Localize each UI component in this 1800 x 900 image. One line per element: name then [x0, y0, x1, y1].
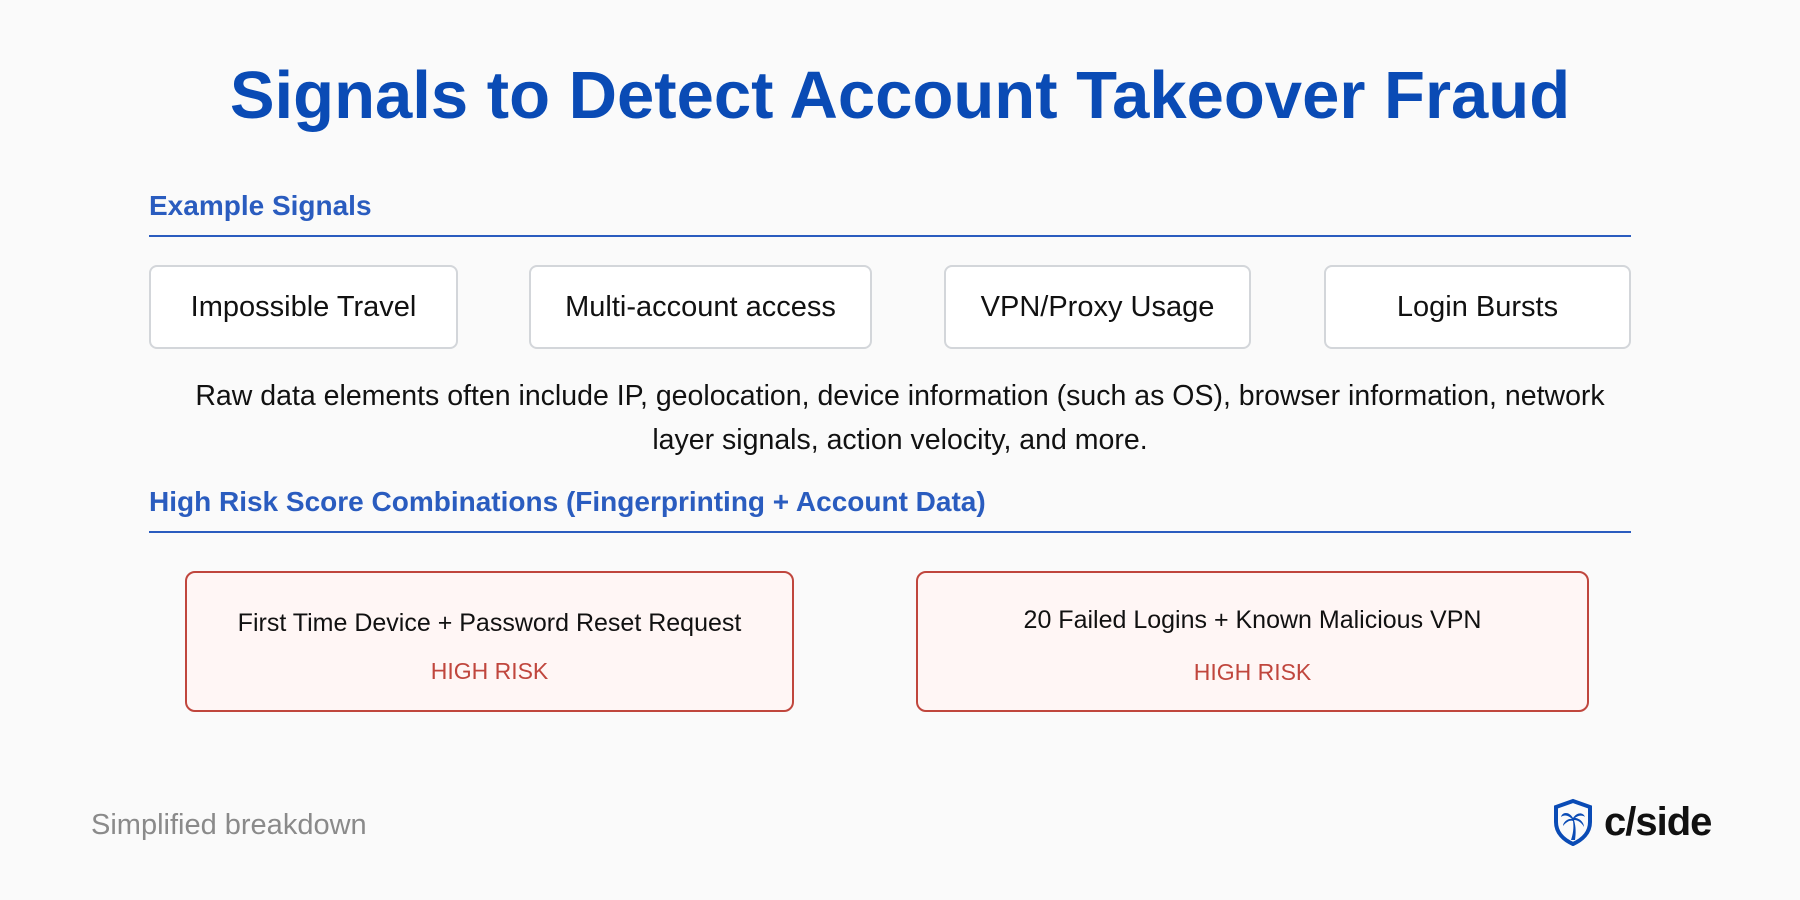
heading: example signals: Example Signals: [149, 190, 372, 221]
signal box: impossible travel: [149, 265, 458, 349]
risk card 2: [916, 571, 1589, 712]
risk card 1: HIGH RISK: [431, 658, 548, 684]
heading: high risk combos: High Risk Score Combinations (Fingerprinting + Account Data): [149, 486, 986, 517]
risk card 2: 20 Failed Logins + Known Malicious VPN: [1024, 606, 1481, 634]
signal box: vpn/proxy: [944, 265, 1251, 349]
footer text: Simplified breakdown: [91, 809, 367, 841]
signal box: multi-account access: [529, 265, 872, 349]
description text: layer signals, action velocity, and more.: [652, 424, 1148, 456]
signal box: multi-account access: Multi-account access: [565, 290, 836, 322]
logo: [1554, 798, 1711, 846]
description text: Raw data elements often include IP, geolocation, device information (such as OS), browser information, network: [195, 380, 1605, 412]
risk card 1: First Time Device + Password Reset Request: [238, 609, 741, 637]
title: Signals to Detect Account Takeover Fraud: [230, 58, 1570, 133]
description text: [195, 380, 1605, 456]
icon: shield with palm: [1554, 798, 1592, 846]
risk card 2: HIGH RISK: [1194, 659, 1311, 685]
signal box: login bursts: [1324, 265, 1631, 349]
logo: c/side: [1604, 800, 1711, 844]
signal box: impossible travel: Impossible Travel: [191, 290, 416, 322]
risk card 1: [185, 571, 794, 712]
signal box: vpn/proxy: VPN/Proxy Usage: [981, 290, 1214, 322]
signal box: login bursts: Login Bursts: [1397, 290, 1558, 322]
